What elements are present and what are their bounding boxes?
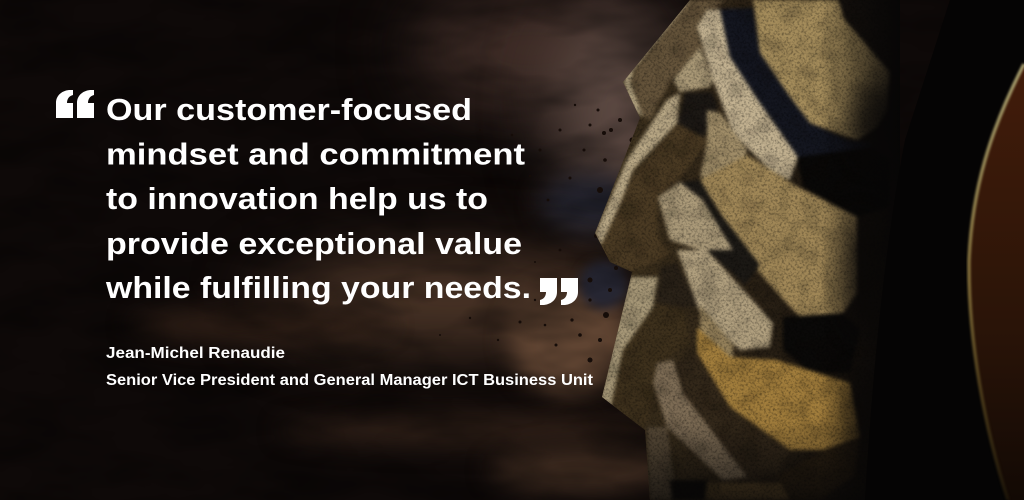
lug 3: top golden tread face	[753, 0, 900, 140]
attribution: Senior Vice President and General Manager ICT Business Unit	[106, 372, 593, 389]
groove beside lug 2	[720, 8, 850, 156]
tire casing	[595, 0, 848, 498]
soil particles	[439, 104, 634, 363]
lug 4: central pale rib	[595, 92, 718, 272]
attribution: Jean-Michel Renaudie	[106, 345, 285, 362]
tan wedge between lugs	[673, 47, 713, 92]
quote text: provide exceptional value	[106, 226, 522, 261]
icon: closing quotation mark	[540, 278, 578, 305]
lug 6: lower tread block	[600, 250, 860, 500]
shadow under central block	[783, 313, 860, 373]
lug 2: pale leading edge	[697, 9, 798, 180]
lug 1: upper left tread block	[623, 0, 725, 120]
icon: opening quotation mark	[56, 90, 94, 118]
right dark sidewall	[865, 0, 1024, 500]
quote text: while fulfilling your needs.	[105, 270, 531, 305]
tread mottling, grain and shadow falloff	[590, 0, 910, 500]
lug 5: main golden tread block	[658, 110, 857, 320]
wheel rim	[969, 64, 1024, 500]
quote text: to innovation help us to	[106, 181, 488, 216]
quote text: Our customer-focused	[106, 92, 472, 127]
quote text	[105, 92, 531, 305]
tire	[590, 0, 910, 500]
attribution	[106, 345, 593, 389]
quote text: mindset and commitment	[106, 136, 525, 172]
shadow between lugs	[796, 151, 859, 211]
